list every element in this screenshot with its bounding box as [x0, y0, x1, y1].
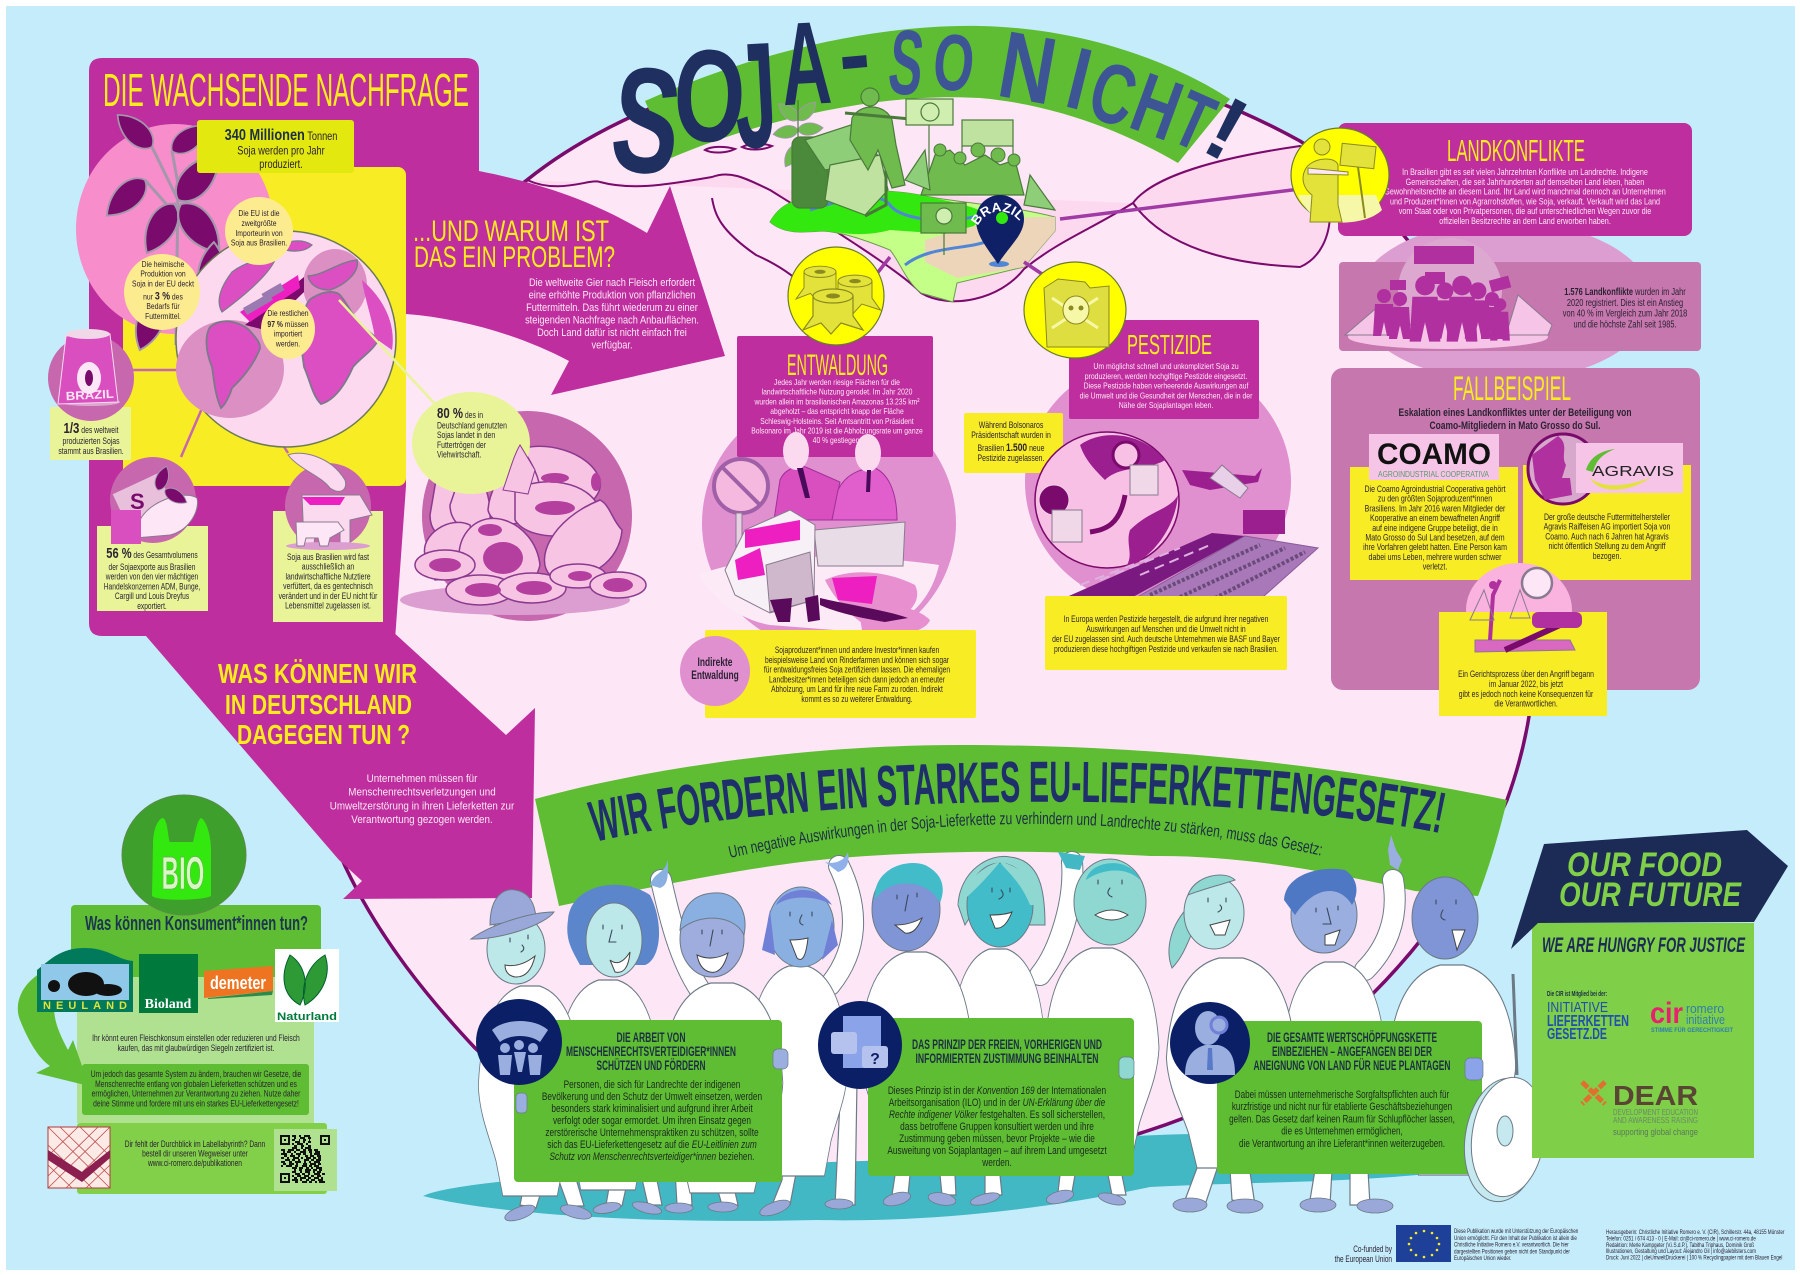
- logo: Initiative Lieferkettengesetz: INITIATIVE: [1547, 999, 1608, 1016]
- fact box: 56 percent: exportiert.: [137, 601, 167, 611]
- logo: Coamo: [1369, 434, 1499, 480]
- fact box: one third: [50, 407, 131, 460]
- bubble: 80 percent: 80 % des in: [437, 404, 483, 421]
- connector line to 80 percent: [339, 300, 435, 404]
- yellow box: Coamo: auf eine indigene Gruppe beteiligt, die in: [1372, 523, 1498, 533]
- title: Soja - So nicht: -: [833, 0, 875, 111]
- text: die weltweite Gier: steigenden Nachfrage nach Anbauflächen.: [525, 315, 699, 327]
- logo: DEAR: supporting global change: [1613, 1127, 1698, 1137]
- logo: DEAR: DEAR: [1613, 1080, 1698, 1111]
- green box: 340 Millionen: produziert.: [259, 159, 303, 171]
- demand box 3: entire value chain: gelten. Das Gesetz darf keinen Raum für Schlupflöcher lassen,: [1229, 1113, 1455, 1126]
- demand box 1: human rights defenders: verfolgt oder sogar ermordet. Um ihren Einsatz gegen: [553, 1115, 751, 1127]
- text: die weltweite Gier: eine erhöhte Produktion von pflanzlichen: [529, 290, 695, 302]
- text: die weltweite Gier: verfügbar.: [591, 340, 633, 352]
- demand box 3: entire value chain: ANEIGNUNG VON LAND FÜR NEUE PLANTAGEN: [1254, 1058, 1450, 1073]
- demand box 3: entire value chain: die Verantwortung an ihre Lieferant*innen weiterzugeben.: [1239, 1138, 1445, 1150]
- logo: DEAR: [1582, 1080, 1698, 1137]
- hands raised: [650, 835, 1402, 888]
- bubble: EU second largest importer: Soja aus Brasilien.: [231, 238, 287, 248]
- purple arrow panel: die wachsende Nachfrage: [89, 58, 725, 899]
- bubble: remaining 97 percent: 97 % müssen: [267, 319, 309, 329]
- icon: soy bag brazil: [48, 329, 134, 421]
- fact box: soy feed: [273, 511, 383, 622]
- raised arms: [661, 862, 1395, 990]
- fact box: 56 percent: 56 % des Gesamtvolumens: [106, 544, 198, 561]
- text: Unternehmen müssen: Umweltzerstörung in ihren Lieferketten zur: [330, 800, 515, 813]
- demand box 1: human rights defenders: [514, 1020, 788, 1182]
- logo: Naturland: [275, 949, 339, 1023]
- demand box 2: free prior informed consent: DAS PRINZIP DER FREIEN, VORHERIGEN UND: [912, 1037, 1102, 1052]
- title: Soja - So nicht: J: [730, 12, 781, 181]
- person 2: [567, 885, 659, 977]
- heading: was können wir in Deutschland dagegen tun: IN DEUTSCHLAND: [225, 689, 412, 720]
- legs and shoes: [503, 1020, 1393, 1224]
- panel: indirect deforestation: Abholzung, um Land für ihre neue Farm zu roden. Indirekt: [771, 684, 943, 694]
- globe: [176, 231, 396, 447]
- icon: tree stumps: [788, 247, 884, 345]
- footer: imprint: Herausgeberin: Christliche Initiative Romero e. V. (CIR), Schillerstr. 44a, 48155 Münster: [1606, 1229, 1784, 1236]
- bubble: EU second largest importer: Die EU ist die: [238, 208, 280, 218]
- bubble: domestic production: Futtermittel.: [145, 311, 181, 321]
- title: Soja - So nicht: T: [1161, 74, 1227, 169]
- panel: Pestizide: [1069, 320, 1259, 419]
- yellow box: Agravis: Der große deutsche Futtermittelhersteller: [1544, 512, 1670, 522]
- demand box 2: free prior informed consent: Dieses Prinzip ist in der Konvention 169 der Internationalen: [888, 1085, 1106, 1097]
- panel: Landkonflikte: Gemeinschaften, die seit Jahrhunderten auf demselben Land leben, haben: [1406, 177, 1644, 187]
- bubble: 80 percent: [412, 392, 535, 494]
- title: Soja - So nicht: S: [884, 10, 928, 115]
- panel: pesticides made in Europe: produzieren diese hochgiftigen Pestizide und verkaufen sie nach Brasilien.: [1054, 644, 1278, 654]
- heading: was können wir in Deutschland dagegen tun: [218, 658, 417, 750]
- panel: our food our future: OUR FOOD: [1567, 846, 1722, 884]
- circle label: Indirekte Entwaldung: [680, 636, 750, 706]
- footer: EU disclaimer: Europäischen Union wieder.: [1454, 1256, 1512, 1263]
- panel: was können Konsumenten tun: Menschenrechte entlang von globalen Lieferketten schützen und es: [95, 1079, 297, 1089]
- title: Soja - So nicht: [604, 0, 1263, 208]
- panel: indirect deforestation: [705, 630, 976, 718]
- fact box: one third: stammt aus Brasilien.: [58, 446, 124, 456]
- title: Soja - So nicht: S: [604, 34, 688, 208]
- icon: label guide booklet: [48, 1127, 110, 1188]
- logo: Initiative Lieferkettengesetz: [1547, 991, 1629, 1043]
- fact box: soy feed: Soja aus Brasilien wird fast: [287, 552, 369, 562]
- yellow box: Coamo: Kooperative an einem bewaffneten Angriff: [1370, 513, 1501, 523]
- footer: EU disclaimer: Diese Publikation wurde mit Unterstützung der Europäischen: [1454, 1228, 1578, 1235]
- logo: Agravis: AGRAVIS: [1592, 463, 1674, 480]
- demand box 1: human rights defenders: DIE ARBEIT VON: [616, 1030, 686, 1045]
- demand box 1: human rights defenders: Bevölkerung und den Schutz der Umwelt einsetzen, werden: [542, 1091, 762, 1103]
- central illustration: deforestation, soldier and protesters: [770, 88, 1055, 302]
- bubble: domestic production: Soja in der EU deckt: [132, 279, 195, 289]
- panel: Labelratgeber: www.ci-romero.de/publikationen: [147, 1158, 242, 1168]
- demand box 3: entire value chain: Dabei müssen unternehmerische Sorgfaltspflichten auch für: [1235, 1089, 1449, 1101]
- panel: Entwaldung: Bolsonaro im Jahr 2019 ist die Abholzungsrate um ganze: [751, 426, 923, 436]
- heading: und warum ist das ein Problem: [413, 215, 615, 274]
- yellow box: court case: gibt es jedoch noch keine Konsequenzen für: [1459, 689, 1594, 699]
- demand box 2: free prior informed consent: Rechte indigener Völker festgehalten. Es soll sicherstellen,: [889, 1109, 1105, 1121]
- bubble: remaining 97 percent: werden.: [275, 339, 300, 349]
- text: die weltweite Gier: Die weltweite Gier nach Fleisch erfordert: [529, 277, 695, 289]
- yellow box: Agravis: [1523, 465, 1691, 580]
- logo: demeter: [204, 966, 273, 999]
- yellow box: Coamo: Die Coamo Agroindustrial Cooperativa gehört: [1364, 484, 1506, 494]
- text: Unternehmen müssen: Menschenrechtsverletzungen und: [348, 786, 496, 799]
- panel: Landkonflikte: Gewohnheitsrechte an diesem Land. Ihr Land wird manchmal dennoch an Unternehmen: [1384, 187, 1666, 197]
- panel: indirect deforestation: beispielsweise Land von Rinderfarmen und können sich sogar: [765, 655, 949, 665]
- person 6: [958, 856, 1045, 947]
- fact box: 1.500 pesticides: Brasilien 1.500 neue: [978, 442, 1044, 454]
- demand box 3: entire value chain: EINBEZIEHEN – ANGEFANGEN BEI DER: [1272, 1044, 1432, 1059]
- panel: was können Konsumenten tun: Was können Konsument*innen tun?: [85, 913, 308, 935]
- icon: cargo ship: [240, 275, 304, 330]
- subtitle on banner: Um negative Auswirkungen in der Soja-Lieferkette zu verhindern und Landrechte zu stärken, muss das Gesetz:: [728, 812, 1322, 858]
- panel: Labelratgeber: bestell dir unseren Wegweiser unter: [142, 1149, 248, 1159]
- panel: our food our future: [1511, 830, 1788, 1158]
- fact box: soy feed: landwirtschaftliche Nutztiere: [285, 572, 371, 582]
- panel: Entwaldung: [737, 336, 933, 457]
- icon: hand with money and plant: [110, 457, 198, 544]
- wheelchair: [1457, 974, 1552, 1207]
- logo: Initiative Lieferkettengesetz: GESETZ.DE: [1547, 1026, 1607, 1043]
- yellow box: court case: [1439, 568, 1607, 716]
- panel: Landkonflikte: und Produzent*innen von Agrarrohstoffen, wie Soja, verkauft. Verkauft wird das Land: [1390, 197, 1660, 207]
- panel: Fallbeispiel: Eskalation eines Landkonfliktes unter der Beteiligung von: [1399, 407, 1631, 419]
- icon: soy bag brazil: BRAZIL: [65, 387, 114, 403]
- title banner: [645, 26, 1230, 163]
- icon: hand feeding cow and pig: [285, 453, 372, 550]
- bubble: remaining 97 percent: [261, 299, 315, 359]
- logo: Coamo: AGROINDUSTRIAL COOPERATIVA: [1378, 470, 1490, 479]
- panel: Landkonflikte: vom Staat oder von Privatpersonen, die auf unterschiedlichen Wegen zuvor die: [1399, 207, 1652, 216]
- footer: imprint: Telefon: 0251 / 674 413 - 0 | E-Mail: cir@ci-romero.de | www.ci-romero.de: [1606, 1236, 1756, 1243]
- heading: was können wir in Deutschland dagegen tun: WAS KÖNNEN WIR: [218, 658, 417, 689]
- panel: was können Konsumenten tun: deine Stimme und fordere mit uns ein starkes EU-Lieferkettengesetz!: [93, 1098, 299, 1109]
- bubble: domestic production: [124, 254, 200, 330]
- bubble: EU second largest importer: Importeurin von: [235, 228, 283, 238]
- demand box 1: human rights defenders: Personen, die sich für Landrechte der indigenen: [564, 1079, 740, 1091]
- fact box: one third: produzierten Sojas: [63, 436, 119, 446]
- panel: Labelratgeber: [77, 1123, 327, 1194]
- icon: document consent circle: ?: [870, 1051, 880, 1068]
- yellow box: Agravis: bezogen.: [1593, 551, 1621, 561]
- icon: bio bag circle: [122, 795, 246, 915]
- panel: Landkonflikte: LANDKONFLIKTE: [1447, 133, 1585, 168]
- logo: Coamo: COAMO: [1377, 438, 1491, 471]
- panel: Fallbeispiel: [1331, 368, 1700, 716]
- fact box: 56 percent: der Sojaexporte aus Brasilien: [109, 562, 195, 572]
- panel: 1.576 Landkonflikte: 2020 registriert. Dies ist ein Anstieg: [1567, 297, 1683, 308]
- panel: was können Konsumenten tun: Um jedoch das gesamte System zu ändern, brauchen wir Gesetze, die: [91, 1069, 301, 1079]
- panel: Landkonflikte: [1338, 123, 1692, 236]
- logo: cir romero initiative: romero: [1686, 1001, 1724, 1016]
- panel: Entwaldung: landwirtschaftliche Nutzung gerodet. Im Jahr 2020: [762, 387, 912, 397]
- footer: EU disclaimer: dargestellten Positionen geben nicht den Standpunkt der: [1454, 1249, 1570, 1256]
- footer: imprint: Druck: Juni 2022 | dieUmweltDruckerei | 100 % Recyclingpapier mit dem Blauen Engel: [1606, 1255, 1782, 1262]
- panel: Pestizide: produzieren, werden hochgiftige Pestizide eingesetzt.: [1085, 371, 1247, 381]
- text: Unternehmen müssen: Unternehmen müssen für: [367, 772, 477, 785]
- yellow box: Agravis: nicht öffentlich Stellung zu dem Angriff: [1548, 541, 1666, 551]
- footer: imprint: Redaktion: Merle Kampgeter (V.i.S.d.P.), Tabitha Triphaus, Dominik Groß: [1606, 1242, 1755, 1249]
- logo: cir romero initiative: [1650, 997, 1733, 1034]
- title: Soja - So nicht: O: [929, 17, 979, 110]
- yellow box: court case: die Verantwortlichen.: [1494, 699, 1558, 709]
- meat pile illustration: [400, 411, 646, 621]
- bubble: 80 percent: Viehwirtschaft.: [437, 450, 481, 460]
- bubble: EU second largest importer: zweitgrößte: [241, 218, 277, 228]
- heading: und warum ist das ein Problem: ...UND WARUM IST: [413, 215, 609, 248]
- demand box 2: free prior informed consent: Ausweitung von Sojaplantagen – auf ihrem Land umgesetzt: [887, 1145, 1107, 1157]
- connector lines from brazil: [875, 189, 1300, 276]
- QR code: [274, 1129, 337, 1191]
- yellow box: Coamo: ihre Vorfahren gelebt hatten. Eine Person kam: [1363, 542, 1507, 552]
- footer: imprint: Illustrationen, Gestaltung und Layout: Alejandro Gil | info@alebilsters.com: [1606, 1249, 1756, 1255]
- logo: Bioland: [139, 954, 198, 1013]
- logo: Agravis: [1576, 443, 1683, 493]
- yellow box: Coamo: verletzt.: [1423, 562, 1447, 572]
- demand box 2: free prior informed consent: Arbeitsorganisation (ILO) und in der UN-Erklärung über die: [889, 1097, 1105, 1109]
- panel: was können Konsumenten tun: ermöglichen, Unternehmen zur Verantwortung zu ziehen. Nutze daher: [92, 1089, 301, 1099]
- panel: our food our future: OUR FUTURE: [1559, 876, 1742, 914]
- panel: Pestizide: die Umwelt und die Gesundheit der Menschen, die in der: [1080, 391, 1253, 401]
- map pin: brazil: [970, 195, 1024, 267]
- logo: Neuland: [37, 948, 133, 1012]
- demand box 3: entire value chain: die es Unternehmen ermöglichen,: [1281, 1126, 1403, 1138]
- footer: EU disclaimer: Union ermöglicht. Für den Inhalt der Publikation ist allein die: [1454, 1235, 1577, 1242]
- green box: 340 Millionen: 340 Millionen Tonnen: [225, 127, 337, 144]
- fact box: 1.500 pesticides: Pestizide zugelassen.: [978, 453, 1044, 463]
- panel: Fallbeispiel: Coamo-Mitgliedern in Mato Grosso do Sul.: [1430, 420, 1601, 432]
- bubble: 80 percent: Sojas landet in den: [437, 430, 495, 440]
- panel: indirect deforestation: Sojaproduzent*innen und andere Investor*innen kaufen: [775, 645, 939, 655]
- map pin: brazil: BRAZIL: [970, 202, 1022, 225]
- fact box: 56 percent: Handelskonzernen ADM, Bunge,: [104, 581, 200, 592]
- circle label: Indirekte Entwaldung: Indirekte: [698, 657, 732, 669]
- green banner: Wir fordern: [535, 745, 1507, 906]
- yellow box: court case: im Januar 2022, bis jetzt: [1489, 679, 1564, 689]
- bubble: 80 percent: Deutschland genutzten: [437, 421, 507, 431]
- yellow box: Coamo: Mato Grosso do Sul Land besetzen, auf dem: [1365, 533, 1505, 543]
- panel: was können Konsumenten tun: [71, 905, 321, 1123]
- person 1 with hat: [471, 890, 554, 984]
- fact box: soy feed: Lebensmittel zugelassen ist.: [285, 601, 371, 611]
- map of south america outlines: [527, 144, 1330, 330]
- yellow box: Coamo: dabei ums Leben, mehrere wurden schwer: [1369, 552, 1502, 562]
- person 10: [1412, 877, 1478, 959]
- yellow box: Coamo: [1350, 467, 1518, 580]
- title: Soja - So nicht: !: [1189, 78, 1263, 181]
- yellow box: Coamo: Brasiliens. Im Jahr 2016 waren Mitglieder der: [1365, 504, 1506, 514]
- panel: 1.576 Landkonflikte: 1.576 Landkonflikte wurden im Jahr: [1564, 286, 1686, 297]
- panel: pesticides made in Europe: In Europa werden Pestizide hergestellt, die aufgrund ihrer negativen: [1064, 614, 1268, 624]
- panel: pesticides made in Europe: [1045, 596, 1287, 670]
- fact box: soy feed: ausschließlich an: [302, 562, 354, 572]
- footer: co-funded by: the European Union: [1335, 1254, 1392, 1264]
- heading: was können wir in Deutschland dagegen tun: DAGEGEN TUN ?: [237, 719, 410, 750]
- bubble: 80 percent: Futtertrögen der: [437, 440, 486, 450]
- title: Soja - So nicht: A: [778, 0, 834, 131]
- footer: co-funded by: [1335, 1244, 1393, 1264]
- panel: Entwaldung: Schleswig-Holsteins. Seit Amtsantritt von Präsident: [760, 416, 914, 426]
- fact box: 56 percent: [97, 526, 208, 611]
- logo: Initiative Lieferkettengesetz: LIEFERKETTEN: [1547, 1013, 1629, 1030]
- text: die weltweite Gier: Doch Land dafür ist nicht einfach frei: [537, 327, 687, 339]
- panel: Entwaldung: wurden allein im brasilianischen Amazonas 13.235 km²: [754, 397, 920, 407]
- bubble: domestic production: Bedarfs für: [146, 301, 180, 311]
- heading: und warum ist das ein Problem: DAS EIN PROBLEM?: [414, 241, 615, 274]
- demand box 3: entire value chain: kurzfristige und nicht nur für etablierte Geschäftsbeziehungen: [1232, 1101, 1452, 1114]
- panel: indirect deforestation: kommt es so zu weiterer Entwaldung.: [801, 694, 913, 704]
- panel: 1.576 Landkonflikte: [1339, 238, 1701, 351]
- yellow box: Agravis: Coamo. Auch nach 6 Jahren hat Agravis: [1545, 532, 1669, 542]
- person 5: [872, 863, 943, 951]
- logo: Bioland: Bioland: [145, 997, 192, 1012]
- circle behind land conflict: [1356, 221, 1652, 381]
- ground ellipse under people: [423, 1134, 1528, 1221]
- bubble: EU second largest importer: [225, 197, 293, 265]
- person 3: [680, 893, 745, 977]
- title: Soja - So nicht: H: [1120, 54, 1194, 159]
- fact box: 1.500 pesticides: Präsidentschaft wurden in: [971, 430, 1051, 440]
- bubble: remaining 97 percent: importiert: [274, 329, 303, 339]
- demand box 2: free prior informed consent: dass betroffene Gruppen konsultiert werden und ihre: [900, 1121, 1094, 1133]
- fact box: soy feed: verfüttert, da es gentechnisch: [283, 581, 373, 591]
- arrow: green curved: [18, 972, 89, 1086]
- panel: Entwaldung: Jedes Jahr werden riesige Flächen für die: [774, 377, 900, 387]
- icon: hand with money and plant: S: [130, 489, 145, 514]
- logo: Neuland: NEULAND: [43, 1000, 127, 1012]
- logo: Initiative Lieferkettengesetz: Die CIR ist Mitglied bei der:: [1547, 991, 1607, 998]
- panel: Landkonflikte: offiziellen Besitzrechte an dem Land erworben haben.: [1439, 216, 1611, 226]
- panel: was können Konsumenten tun: Ihr könnt euren Fleischkonsum einstellen oder reduzieren und Fleisch: [92, 1033, 300, 1043]
- bubble: domestic production: nur 3 % des: [143, 291, 183, 303]
- panel circle: deforestation background: [702, 396, 956, 650]
- bubble: domestic production: Die heimische: [142, 259, 184, 269]
- icon: armed man with sign: [1291, 128, 1389, 223]
- panel: indirect deforestation: Landbesitzer*innen beteiligen sich dann jedoch an erneuter: [769, 674, 945, 685]
- panel: Landkonflikte: In Brasilien gibt es seit vielen Jahrzehnten Konflikte um Landrechte. Indigene: [1402, 167, 1648, 177]
- illustration: business men and bulldozer: [698, 432, 939, 635]
- yellow box: Agravis: Agravis Raiffeisen AG importiert Soja von: [1544, 522, 1670, 532]
- panel: was können Konsumenten tun: kaufen, das mit glaubwürdigen Siegeln zertifiziert ist.: [118, 1043, 274, 1053]
- text: Unternehmen müssen: Verantwortung gezogen werden.: [351, 813, 493, 826]
- icon: magnifier person circle: [1170, 1002, 1250, 1084]
- panel circle: pesticides background: [1025, 356, 1291, 608]
- icon: poison canister: [1024, 262, 1126, 358]
- people group: [471, 835, 1516, 1224]
- fact box: 56 percent: werden von den vier mächtigen: [105, 572, 198, 582]
- text: die weltweite Gier: Futtermitteln. Das führt wiederum zu einer: [526, 302, 698, 314]
- yellow box: Coamo: zu den größten Sojaproduzent*innen: [1378, 494, 1492, 504]
- heading: Wir fordern ein starkes EU-Lieferkettengesetz: WIR FORDERN EIN STARKES EU-LIEFERKETTENGESETZ!: [586, 761, 1446, 841]
- large pink circle: [281, 50, 1535, 1184]
- panel: Pestizide: Um möglichst schnell und unkompliziert Soja zu: [1093, 361, 1239, 371]
- fact box: 1.500 pesticides: Während Bolsonaros: [979, 420, 1043, 430]
- icon: bio bag circle: BIO: [162, 847, 204, 899]
- bubble: domestic production: Produktion von: [140, 269, 186, 279]
- bubble: remaining 97 percent: Die restlichen: [267, 308, 309, 318]
- person 8 with ponytail: [1169, 875, 1244, 968]
- panel: Entwaldung: abgeholzt – das entspricht knapp der Fläche: [770, 406, 904, 416]
- demand box 1: human rights defenders: SCHÜTZEN UND FÖRDERN: [596, 1058, 706, 1073]
- green box: 340 Millionen: Soja werden pro Jahr: [237, 146, 325, 158]
- panel: 1.576 Landkonflikte: von 40 % im Vergleich zum Jahr 2018: [1563, 307, 1687, 319]
- demand box 1: human rights defenders: Schutz von Menschenrechtsverteidiger*innen beziehen.: [550, 1151, 754, 1163]
- demand box 2: free prior informed consent: Zustimmung geben müssen, bevor Projekte – wie die: [899, 1133, 1095, 1145]
- person 9: [1284, 869, 1357, 953]
- soy plant illustration: [76, 107, 274, 354]
- title: Soja - So nicht: C: [1079, 43, 1147, 146]
- icon: EU flag: [1396, 1225, 1451, 1262]
- fact box: soy feed: verändert und in der EU nicht für: [279, 591, 378, 601]
- panel: 1.576 Landkonflikte: und die höchste Zahl seit 1985.: [1573, 318, 1677, 330]
- panel: Entwaldung: 40 % gestiegen.: [813, 435, 861, 445]
- icon: document consent circle: [818, 1001, 902, 1089]
- footer: co-funded by: Co-funded by: [1353, 1244, 1393, 1254]
- demand box 2: free prior informed consent: INFORMIERTEN ZUSTIMMUNG BEINHALTEN: [916, 1051, 1098, 1066]
- demand box 1: human rights defenders: zerstörerische Unternehmenspraktiken zu schützen, sollte: [545, 1127, 759, 1139]
- green box: 340 Millionen: [197, 120, 354, 173]
- icon: silence face: [1528, 434, 1598, 504]
- logo: cir romero initiative: initiative: [1686, 1012, 1725, 1027]
- fact box: one third: 1/3 des weltweit: [64, 419, 118, 436]
- panel: pesticides made in Europe: der EU zugelassen sind. Auch deutsche Unternehmen wie BASF und Bayer: [1052, 634, 1280, 644]
- heading: die wachsende Nachfrage: DIE WACHSENDE NACHFRAGE: [103, 64, 469, 116]
- panel: pesticides made in Europe: Auswirkungen auf Menschen und die Umwelt nicht in: [1086, 624, 1246, 634]
- fact box: 1.500 pesticides: [964, 413, 1063, 473]
- person 4: [762, 887, 838, 967]
- demand box 2: free prior informed consent: [868, 1018, 1134, 1176]
- footer: EU disclaimer: Christliche Initiative Romero e.V. verantwortlich. Die hier: [1454, 1242, 1569, 1249]
- person 7: [1074, 859, 1146, 945]
- logo: cir romero initiative: STIMME FÜR GERECHTIGKEIT: [1651, 1025, 1733, 1034]
- demand box 1: human rights defenders: besonders stark kriminalisiert und aufgrund ihrer Arbeit: [551, 1103, 753, 1115]
- panel: Pestizide: Nähe der Sojaplantagen leben.: [1119, 400, 1213, 410]
- logo: cir romero initiative: cir: [1650, 997, 1683, 1030]
- panel: Entwaldung: ENTWALDUNG: [787, 349, 888, 382]
- title: Soja - So nicht: O: [671, 22, 748, 170]
- circle label: Indirekte Entwaldung: Entwaldung: [691, 670, 739, 682]
- logo: DEAR: AND AWARENESS RAISING: [1613, 1116, 1698, 1125]
- logo: Naturland: Naturland: [277, 1011, 337, 1023]
- illustration: pesticide globe, plane and field: [1035, 432, 1318, 604]
- panel: Labelratgeber: Dir fehlt der Durchblick im Labellabyrinth? Dann: [125, 1139, 265, 1149]
- yellow box: court case: Ein Gerichtsprozess über den Angriff begann: [1458, 669, 1594, 679]
- demand box 3: entire value chain: [1217, 1021, 1483, 1174]
- title: Soja - So nicht: N: [991, 11, 1064, 125]
- demand box 1: human rights defenders: MENSCHENRECHTSVERTEIDIGER*INNEN: [566, 1044, 736, 1059]
- panel: Pestizide: PESTIZIDE: [1127, 329, 1212, 360]
- fact box: 56 percent: Cargill und Louis Dreyfus: [115, 591, 189, 601]
- demand box 2: free prior informed consent: werden.: [981, 1157, 1012, 1169]
- panel: Fallbeispiel: FALLBEISPIEL: [1453, 370, 1571, 408]
- title: Soja - So nicht: I: [1058, 28, 1101, 129]
- torsos: [478, 948, 1516, 1196]
- icon: defenders circle: [476, 999, 562, 1085]
- logo: demeter: demeter: [210, 973, 266, 993]
- logo: DEAR: DEVELOPMENT EDUCATION: [1613, 1108, 1698, 1117]
- panel: Pestizide: Diese Pestizide haben verheerende Auswirkungen auf: [1084, 381, 1249, 391]
- icon: scales, clock and gavel: [1466, 563, 1572, 657]
- yellow background panel: [123, 167, 406, 486]
- connector lines to globe: [132, 370, 288, 457]
- panel: indirect deforestation: für entwaldungsfreies Soja zertifizieren lassen. Die ehemaligen: [764, 665, 950, 675]
- demand box 3: entire value chain: DIE GESAMTE WERTSCHÖPFUNGSKETTE: [1267, 1030, 1437, 1045]
- demand box 1: human rights defenders: sich das EU-Lieferkettengesetz auf die EU-Leitlinien zum: [547, 1139, 757, 1151]
